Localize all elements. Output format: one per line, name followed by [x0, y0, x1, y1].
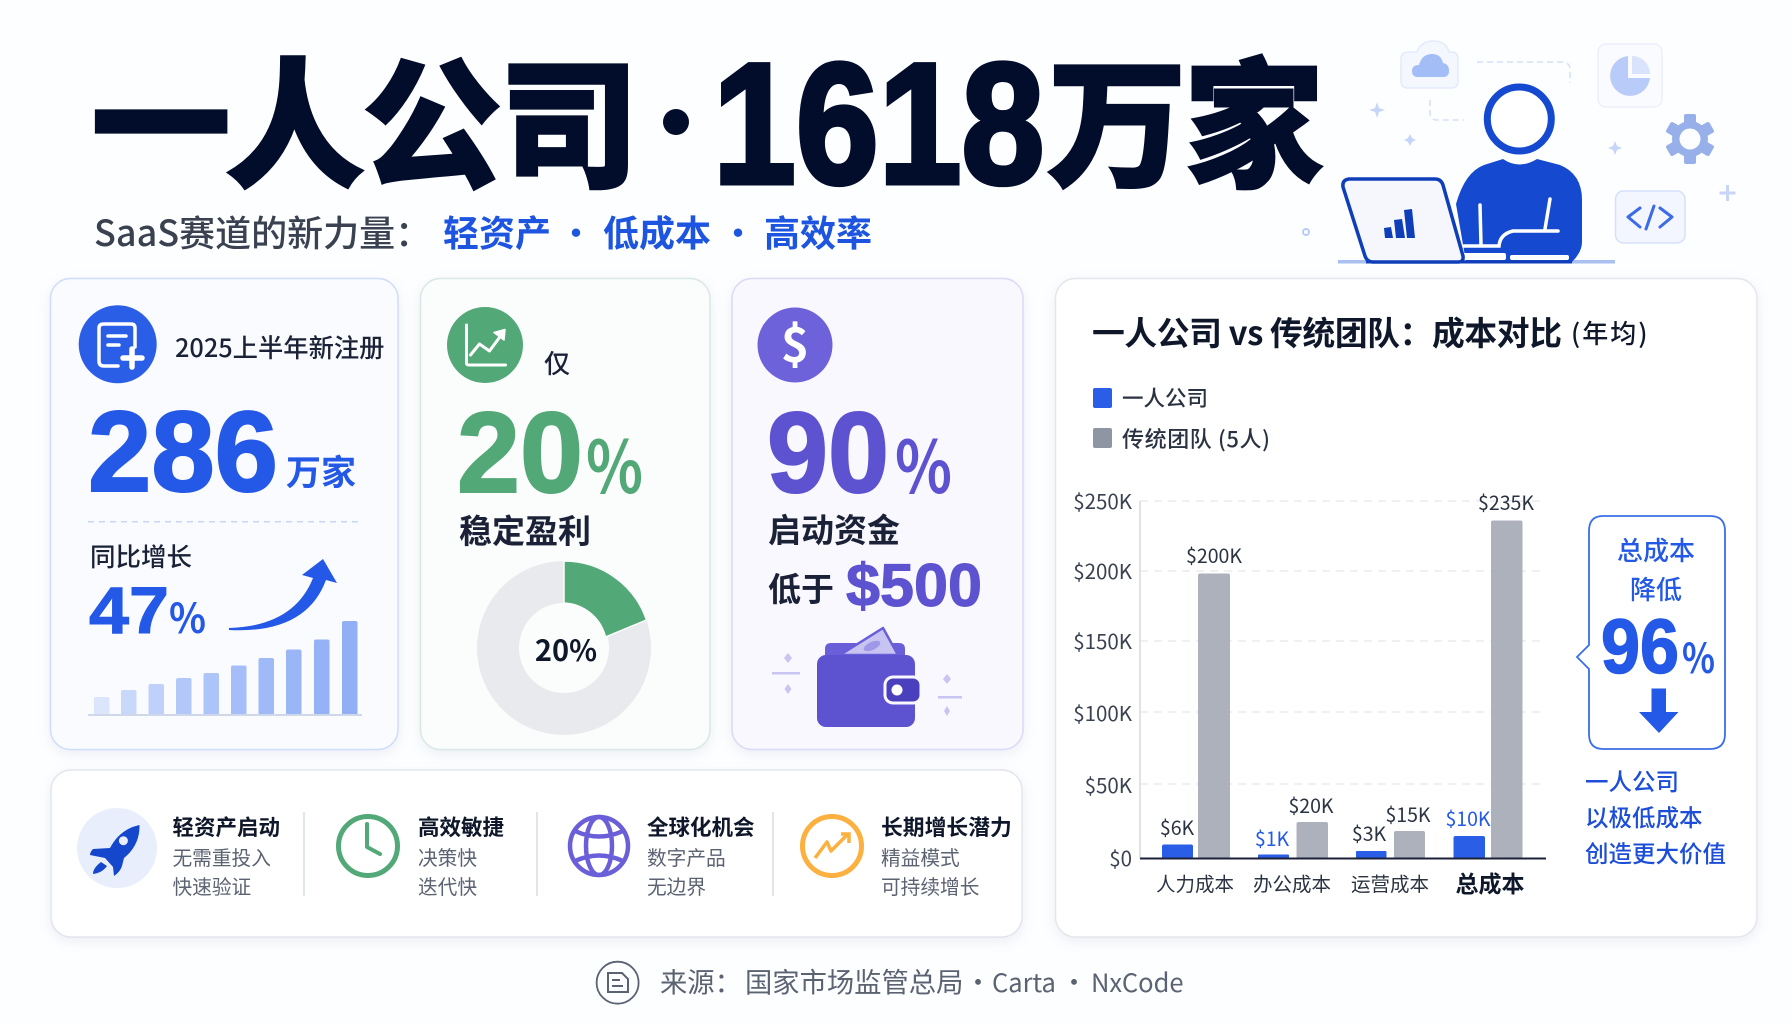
- category labels: [1156, 865, 1524, 899]
- icon: dollar: $: [781, 306, 809, 376]
- big number: 90: [767, 390, 889, 517]
- y axis labels: $0: [1109, 842, 1132, 872]
- bars: [1162, 520, 1522, 858]
- y axis labels: $150K: [1073, 625, 1133, 655]
- icon: cloud tile: [1401, 41, 1458, 88]
- icon: rocket: [77, 808, 157, 888]
- big number: %: [586, 409, 643, 514]
- item: agile: 高效敏捷: [418, 811, 504, 842]
- item: agile: [418, 811, 504, 900]
- title: 家: [1184, 15, 1324, 217]
- y axis labels: $100K: [1073, 697, 1133, 727]
- sparkles: [1303, 102, 1736, 235]
- callout caption: 以极低成本: [1585, 799, 1702, 833]
- growth value: 47: [89, 573, 169, 647]
- icon: growth circle: [802, 816, 862, 876]
- title: 司: [499, 15, 639, 217]
- donut chart: 20%: [498, 561, 646, 714]
- item: light asset: 快速验证: [172, 871, 251, 900]
- icon: gear: [1665, 114, 1715, 164]
- bar chart: cost comparison: [1073, 485, 1546, 899]
- item: global: 无边界: [647, 871, 706, 900]
- item: global: 数字产品: [647, 842, 726, 871]
- subtitle: [94, 205, 872, 257]
- item: long-term: 长期增长潜力: [881, 811, 1012, 842]
- big number: [767, 390, 952, 517]
- panel: highlights strip: [51, 770, 1022, 937]
- source text: Carta: [992, 963, 1056, 1000]
- subtitle: ·: [558, 205, 594, 257]
- big number: 286: [88, 389, 278, 516]
- growth label: 同比增长: [90, 537, 192, 574]
- panel: new registrations: [50, 278, 398, 750]
- label: 仅: [544, 344, 570, 381]
- legend: 传统团队 (5人): [1122, 422, 1271, 454]
- source text: ·: [1060, 960, 1088, 1000]
- icon: laptop: [1343, 179, 1572, 262]
- item: agile: 决策快: [418, 842, 477, 871]
- value labels: $200K: [1186, 540, 1242, 569]
- item: light asset: 轻资产启动: [172, 811, 280, 842]
- callout caption: 一人公司: [1585, 763, 1679, 797]
- growth value: %: [169, 585, 206, 645]
- icon: wallet: [817, 628, 921, 727]
- sparkles: [772, 653, 962, 716]
- callout caption: 创造更大价值: [1585, 835, 1726, 869]
- value labels: [1160, 487, 1534, 852]
- subtitle: ·: [720, 205, 756, 257]
- item: agile: 迭代快: [418, 871, 477, 900]
- icon: line chart: [447, 307, 523, 383]
- y axis labels: $50K: [1085, 769, 1133, 799]
- panel: startup capital: [732, 278, 1023, 750]
- big number: %: [895, 409, 952, 514]
- value labels: $1K: [1255, 823, 1290, 852]
- icon: pie chart tile: [1598, 44, 1662, 107]
- hero illustration: solo founder at laptop: [1303, 41, 1736, 264]
- item: light asset: 无需重投入: [172, 842, 271, 871]
- callout: total cost down 96%: 降低: [1630, 570, 1682, 607]
- y axis labels: $200K: [1073, 555, 1133, 585]
- value labels: $3K: [1352, 818, 1387, 847]
- panel: stable profit: [420, 278, 710, 750]
- legend: [1093, 382, 1271, 454]
- category labels: 总成本: [1456, 865, 1524, 899]
- item: long-term: [881, 811, 1012, 900]
- subtitle: 轻资产: [443, 205, 551, 257]
- donut chart: 20%: 20%: [535, 628, 597, 670]
- callout: total cost down 96%: [1577, 516, 1725, 749]
- bar chart: growth trend: [88, 621, 362, 715]
- chart heading: 一人公司 vs 传统团队：成本对比: [1092, 308, 1562, 355]
- title: [91, 15, 1324, 220]
- icon: clock: [338, 816, 398, 876]
- item: light asset: [172, 811, 280, 900]
- callout caption: [1585, 763, 1726, 869]
- subtitle: 高效率: [764, 205, 872, 257]
- title: 一: [91, 15, 231, 217]
- category labels: 人力成本: [1156, 868, 1234, 897]
- big number: 20: [457, 390, 583, 517]
- item: global: [647, 811, 755, 900]
- subtitle: SaaS赛道的新力量：: [94, 205, 431, 257]
- caption: 启动资金: [768, 504, 900, 552]
- callout: total cost down 96%: 96: [1601, 604, 1679, 690]
- category labels: 运营成本: [1351, 868, 1429, 897]
- value labels: $15K: [1385, 799, 1431, 828]
- caption with amount: 低于: [768, 563, 834, 611]
- icon: code tile: [1616, 191, 1685, 243]
- icon: document plus: [79, 305, 157, 383]
- big number: 万家: [286, 445, 356, 496]
- title: 万: [1047, 15, 1187, 217]
- caption with amount: [768, 552, 982, 619]
- value labels: $10K: [1445, 803, 1491, 832]
- value labels: $6K: [1160, 812, 1195, 841]
- title: 人: [225, 15, 365, 217]
- callout: total cost down 96%: 总成本: [1617, 531, 1695, 568]
- source text: [660, 960, 1184, 1000]
- source footer: [597, 960, 1184, 1004]
- label: 2025上半年新注册: [175, 329, 384, 365]
- icon: dollar: [758, 306, 832, 382]
- big number: [457, 390, 643, 517]
- icon: source document: [597, 962, 639, 1004]
- y axis labels: [1073, 485, 1133, 872]
- title: 公: [362, 15, 502, 217]
- growth value: [89, 573, 206, 647]
- chart heading: (年均): [1571, 314, 1650, 351]
- panel: cost comparison: [1056, 278, 1757, 937]
- title: 1618: [713, 28, 1044, 220]
- caption: 稳定盈利: [459, 505, 591, 553]
- item: global: 全球化机会: [647, 811, 755, 842]
- caption with amount: $500: [846, 552, 982, 619]
- value labels: $20K: [1288, 790, 1334, 819]
- category labels: 办公成本: [1253, 868, 1331, 897]
- source text: ·: [964, 960, 992, 1000]
- arrow: down: [1639, 688, 1678, 733]
- item: long-term: 可持续增长: [881, 871, 980, 900]
- icon: globe: [570, 817, 628, 875]
- source text: 国家市场监管总局: [745, 960, 963, 1000]
- legend: 一人公司: [1122, 382, 1208, 413]
- icon: person: [1456, 87, 1582, 262]
- item: long-term: 精益模式: [881, 842, 960, 871]
- subtitle: 低成本: [603, 205, 711, 257]
- callout: total cost down 96%: %: [1682, 625, 1715, 685]
- source text: NxCode: [1091, 963, 1184, 1000]
- source text: 来源：: [660, 960, 742, 1000]
- arrow: growth: [229, 559, 337, 630]
- y axis labels: $250K: [1073, 485, 1133, 515]
- value labels: $235K: [1478, 487, 1534, 516]
